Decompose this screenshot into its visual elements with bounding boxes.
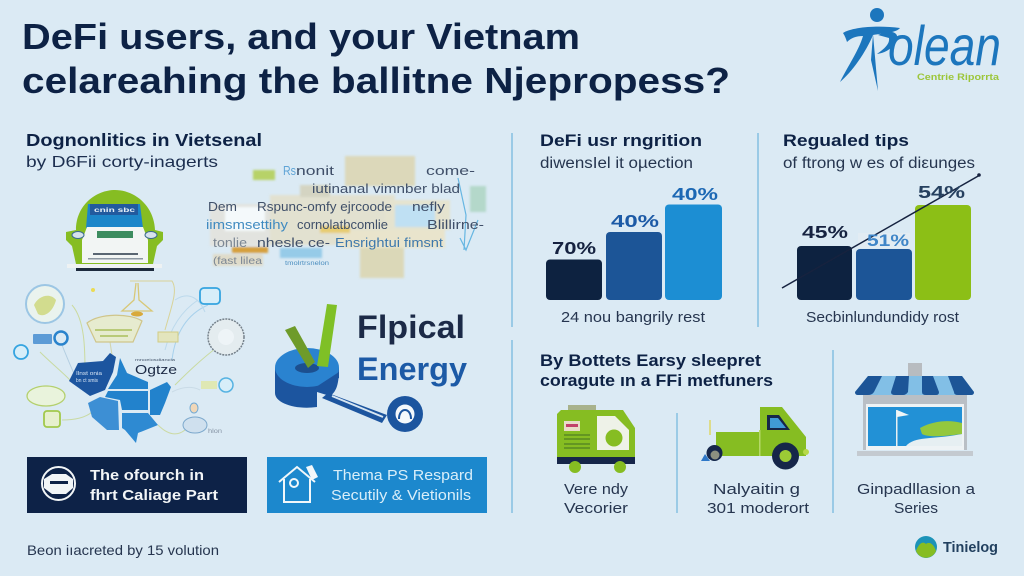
chart heading [783,131,975,172]
icon: blue cylinder with green levers and key [275,304,423,432]
labels under icons: Nalyaitin g [713,481,800,498]
scrambled text block with map fragments: cornolatbcomlie [297,217,388,232]
scrambled text block with map fragments: Rspunc-omfy ejrcoode [257,199,392,214]
map diagram with connected nodes [14,281,244,443]
chart heading [540,131,702,172]
dividers [512,133,833,513]
heading: lower section: By Bottets Earsy sleepret [540,351,761,370]
far-left node [14,345,28,359]
pale map fragments [210,156,486,278]
labels under icons [564,481,976,517]
logo: Aolean [840,8,1001,91]
panel: regulated tips chart [782,131,981,326]
scrambled text block with map fragments: (fast lilea [213,256,263,267]
map diagram with connected nodes: hlon [208,429,222,435]
brand mark: Tinielog [915,536,998,558]
scrambled text block with map fragments: Rs [283,163,296,178]
brand mark: Tinielog: Tinielog [943,540,998,556]
map diagram with connected nodes: Ilnst onia [76,371,103,377]
scrambled text block with map fragments: tonlie [213,235,247,250]
callout: blue box: Secutily & Vietionils [331,488,471,504]
logo: Aolean: Centrie Riporrta [917,72,1000,83]
basket sketch [87,315,142,342]
bar chart: 40% [611,211,660,231]
scrambled text block with map fragments: tmolrtrsnelon [285,261,329,267]
label: Flpical Energy: Energy [357,351,467,387]
map: regions [69,353,116,396]
chart heading: DeFi usr rngrition [540,131,702,150]
bar chart [546,184,722,300]
connector lines [40,281,220,434]
scrambled text block with map fragments: Dem [208,199,237,214]
map diagram with connected nodes: mnoeiosdiancia [135,357,176,362]
scrambled text block with map fragments: nhesle ce- [257,235,330,250]
icon: green and white vehicle: cnin sbc [94,207,136,214]
callout: blue box: Thema PS Respard [333,468,473,484]
scrambled text block with map fragments: come- [426,163,475,178]
logo: Aolean: olean [888,14,1001,77]
title: celareahing the ballitne Njepropess? [22,60,730,101]
icon: green delivery van [557,405,635,473]
scrambled text block with map fragments [206,156,486,278]
bar chart: 70% [552,238,597,258]
dial [208,319,244,355]
scrambled text block with map fragments: Blillirne- [427,217,484,232]
basket right [158,332,178,342]
label: Flpical Energy [357,309,467,387]
labels under icons: 301 moderort [707,500,810,517]
labels under icons: Vecorier [564,500,628,517]
heading: diagnostics: by D6Fii corty-inagerts [26,154,218,171]
panel: DeFi user migration chart [540,131,722,326]
top-left globe [26,285,64,323]
map diagram with connected nodes: Ogtze [135,362,177,377]
green node left [27,386,65,406]
bar chart: 40% [672,184,719,204]
labels under icons: Vere ndy [564,481,629,498]
label: Flpical Energy: Flpical [357,309,465,345]
icon: storefront [855,363,974,456]
icon: green truck [701,407,809,470]
map diagram with connected nodes: bn ct smis [76,378,98,384]
scrambled text block with map fragments: nefly [412,199,446,214]
bar chart with trend line: 45% [802,222,849,242]
labels under icons: Ginpadllasion a [857,481,976,498]
scrambled text block with map fragments: iimsmsettihy [206,217,289,232]
footer note: Beon iıacreted by 15 volution [27,542,219,558]
heading: lower section: coragute ın a FFi metfuners [540,371,773,390]
chart heading: Regualed tips [783,131,909,150]
labels under icons: Series [894,500,938,517]
scrambled text block with map fragments: Ensrightui fimsnt [335,235,443,250]
chart heading: of ftrong w es of diεunges [783,155,975,172]
bar chart with trend line [782,173,981,300]
callout: dark box [27,457,247,513]
tag: left label [33,334,52,344]
callout: dark box: fhrt Caliage Part [90,487,218,504]
chart caption: Secbinlundundidy rost [806,309,960,326]
bar chart with trend line: 54% [918,182,966,202]
title [22,16,730,101]
top right badge [200,288,220,304]
bar chart with trend line: 51% [867,232,909,250]
title: DeFi users, and your Vietnam [22,16,580,57]
right nodes [219,378,233,392]
scrambled text block with map fragments: nonit [296,163,335,178]
icon: green and white vehicle [66,190,163,271]
heading: lower section [540,351,773,390]
heading: diagnostics: Dognonlitics in Vietsenal [26,130,262,150]
chart caption: 24 nou bangrily rest [561,309,706,326]
callout: blue box [267,457,487,513]
lamp sketch [122,283,152,311]
heading: diagnostics [26,130,262,171]
chart heading: diwensIel it oµection [540,155,693,172]
callout: dark box: The ofourch in [90,467,204,484]
scrambled text block with map fragments: iutinanal vimnber blad [312,181,460,196]
